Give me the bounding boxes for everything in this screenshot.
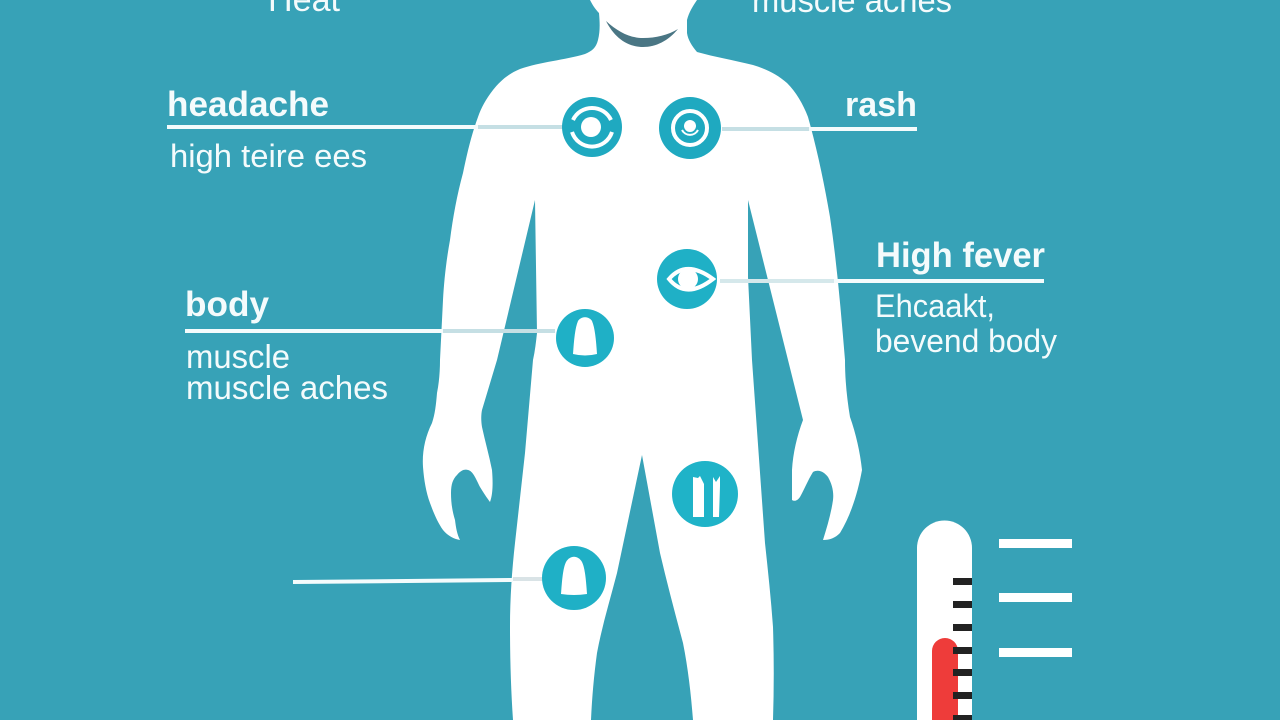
callout: body bbox=[185, 285, 555, 406]
callout: rash bbox=[722, 86, 917, 131]
body silhouette bbox=[423, 0, 862, 720]
icon: bell shape lower bbox=[542, 546, 606, 610]
callout: high fever: bevend body bbox=[875, 323, 1057, 359]
callout: headache: high teire ees bbox=[170, 138, 367, 174]
icon: ring target bbox=[562, 97, 622, 157]
icon: concentric eye bbox=[659, 97, 721, 159]
temperature legend bars bbox=[999, 539, 1072, 657]
callout: high fever: Ehcaakt, bbox=[875, 288, 995, 324]
callout: body: muscle bbox=[186, 338, 290, 375]
icon: bars bbox=[672, 461, 738, 527]
callout: body: body bbox=[185, 285, 270, 324]
icon: eye bbox=[657, 249, 717, 309]
icon: bell shape upper bbox=[556, 309, 614, 367]
thermometer bbox=[917, 520, 972, 720]
callout: body: muscle aches bbox=[186, 369, 388, 406]
callout: high fever: High fever bbox=[876, 236, 1045, 275]
callout: headache bbox=[167, 85, 564, 174]
mercury bbox=[932, 638, 958, 720]
chin shadow bbox=[606, 21, 678, 47]
leader line: lower leg bbox=[293, 577, 545, 584]
callout: high fever bbox=[720, 236, 1057, 359]
callout: rash: rash bbox=[845, 86, 917, 124]
callout: headache: headache bbox=[167, 85, 329, 124]
